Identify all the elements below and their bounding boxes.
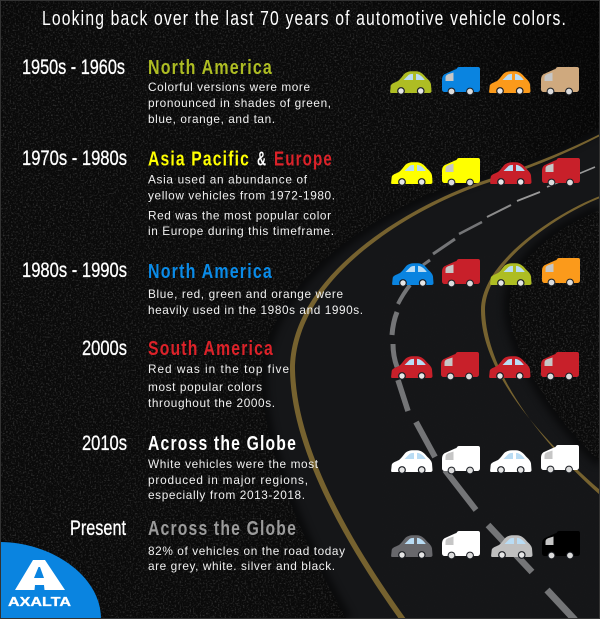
description: White vehicles were the most (148, 457, 319, 471)
description: 82% of vehicles on the road today (148, 544, 345, 558)
region heading: North America (148, 261, 273, 283)
row: 2010s (82, 432, 579, 502)
logo mark (15, 560, 65, 590)
description: throughout the 2000s. (148, 396, 275, 410)
road centre dashes (392, 167, 595, 619)
era label: Present (70, 517, 126, 540)
row: 1970s-1980s (22, 147, 580, 238)
era label: 2000s (82, 337, 127, 360)
description: heavily used in the 1980s and 1990s. (148, 303, 363, 317)
description: yellow vehicles from 1972-1980. (148, 188, 335, 202)
era label: 1980s - 1990s (22, 259, 127, 282)
road (262, 128, 599, 618)
description: produced in major regions, (148, 473, 308, 487)
description: are grey, white. silver and black. (148, 559, 335, 573)
description: Red was in the top five (148, 362, 289, 376)
era label: 1950s - 1960s (22, 56, 125, 79)
Axalta logo (0, 542, 101, 619)
region heading: Across the Globe (148, 518, 297, 540)
description: Blue, red, green and orange were (148, 287, 343, 301)
region heading: North America (148, 57, 273, 79)
description: in Europe during this timeframe. (148, 224, 334, 238)
row: present (70, 517, 580, 573)
road edge line: left (290, 134, 600, 619)
description: Colorful versions were more (148, 80, 310, 94)
description: most popular colors (148, 380, 262, 394)
region heading: Asia Pacific (148, 148, 250, 170)
vehicles: grey, white, silver, black (391, 531, 580, 559)
region heading: South America (148, 338, 274, 360)
description: Red was the most popular color (148, 208, 331, 222)
row: 1950s-1960s (22, 56, 579, 126)
description: especially from 2013-2018. (148, 488, 305, 502)
logo corner (0, 542, 101, 619)
vehicles: green, blue, orange, tan (390, 67, 579, 95)
logo wordmark: AXALTA (8, 594, 72, 609)
region heading: & (257, 148, 267, 170)
vehicles: blue, red, green, orange (392, 258, 580, 287)
region heading: Across the Globe (148, 433, 297, 455)
vehicles: all red (391, 352, 579, 380)
description: Asia used an abundance of (148, 172, 308, 186)
row: 1980s-1990s (22, 258, 580, 317)
vehicles: all white (391, 445, 579, 474)
region heading: Europe (274, 148, 333, 170)
era label: 1970s - 1980s (22, 147, 127, 170)
era label: 2010s (82, 432, 127, 455)
description: pronounced in shades of green, (148, 96, 331, 110)
description: blue, orange, and tan. (148, 112, 275, 126)
vehicles: yellow, yellow, red, red (391, 158, 580, 186)
road edge line: right (481, 196, 600, 495)
row: 2000s (82, 337, 579, 410)
